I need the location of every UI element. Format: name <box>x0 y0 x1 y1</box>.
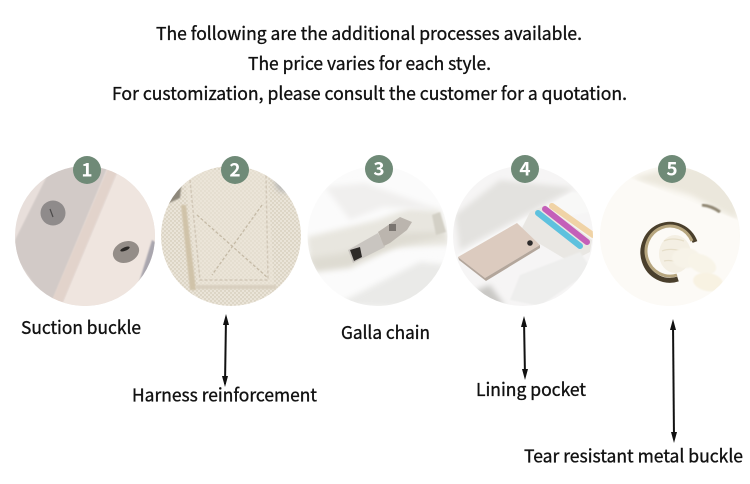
heading text: The price varies for each style. <box>248 50 491 76</box>
photo 3: Galla chain zipper <box>308 182 448 306</box>
badge 1 <box>73 156 101 184</box>
arrow: tear resistant metal buckle <box>670 319 677 443</box>
label: suction buckle: Suction buckle <box>21 314 141 340</box>
badge 2: 2 <box>229 156 241 182</box>
label: Galla chain: Galla chain <box>341 319 430 345</box>
arrow: lining pocket <box>521 316 528 380</box>
arrow: harness reinforcement <box>222 314 229 387</box>
heading text: The following are the additional processes available. <box>156 20 582 46</box>
heading text: For customization, please consult the customer for a quotation. <box>112 80 627 106</box>
photo 5: tear resistant metal buckle <box>598 165 745 310</box>
label: tear resistant metal buckle: Tear resistant metal buckle <box>524 442 743 468</box>
badge 2 <box>221 156 249 184</box>
badge 4: 4 <box>519 154 531 182</box>
badge 3: 3 <box>373 154 385 182</box>
photo 4: lining pocket <box>453 166 594 306</box>
badge 3 <box>365 154 393 183</box>
label: harness reinforcement: Harness reinforcement <box>132 382 317 408</box>
badge 1: 1 <box>81 156 93 182</box>
photo 1: suction buckle <box>15 167 155 306</box>
photo 2: harness reinforcement <box>161 166 301 306</box>
badge 4 <box>511 154 539 183</box>
badge 5: 5 <box>666 154 678 182</box>
badge 5 <box>658 154 686 183</box>
heading text <box>112 20 627 106</box>
label: lining pocket: Lining pocket <box>476 376 586 402</box>
